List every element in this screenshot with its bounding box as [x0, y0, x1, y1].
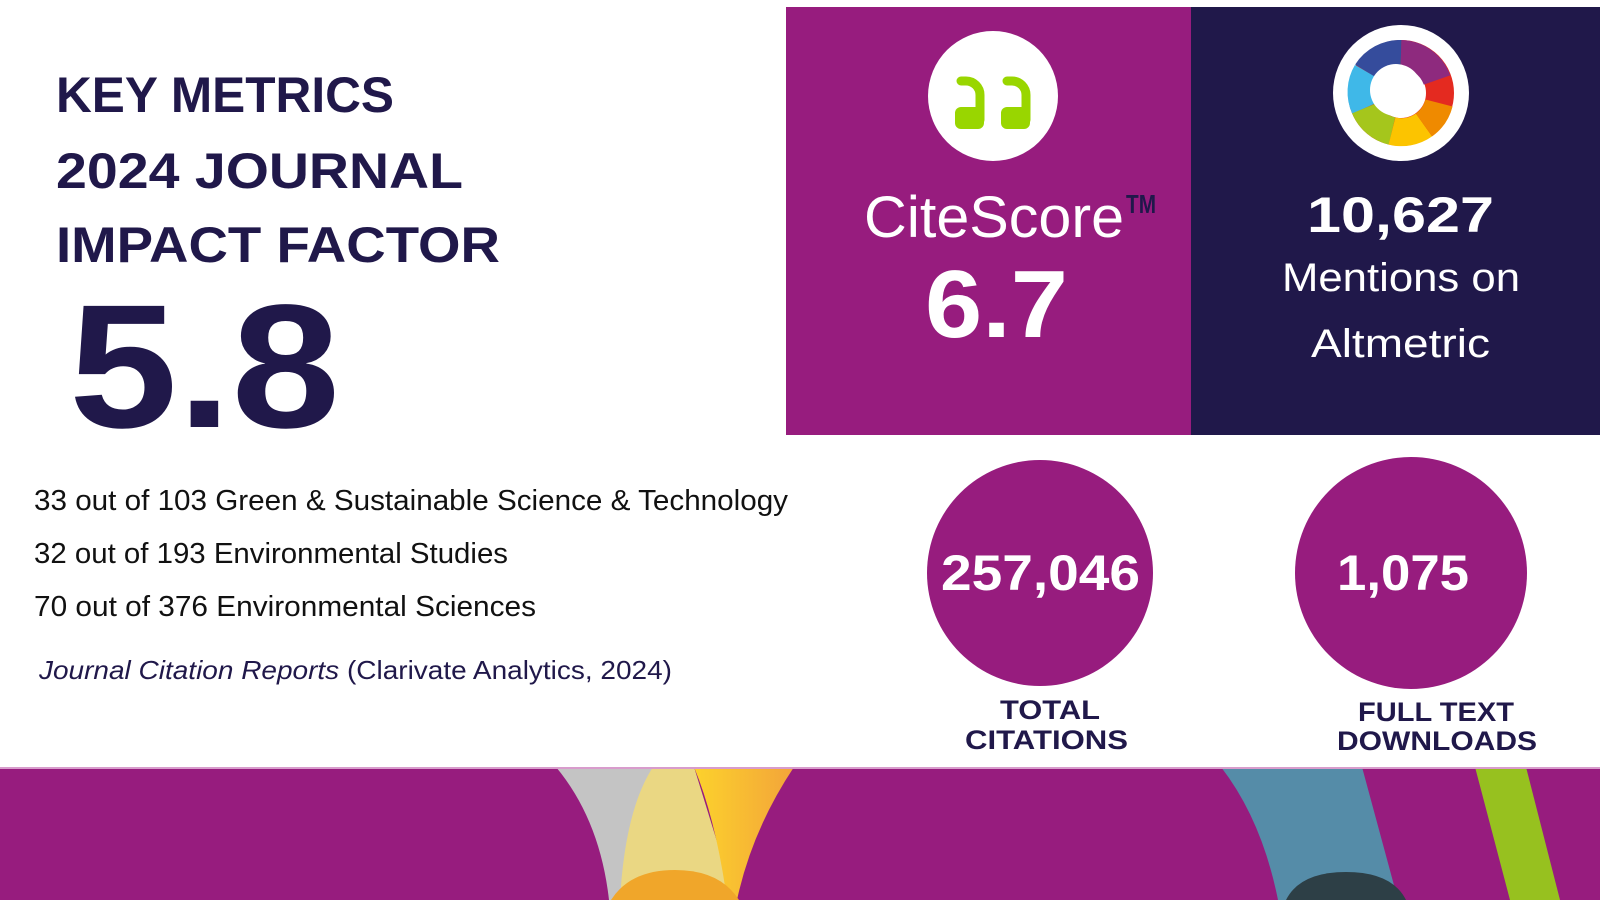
title block — [56, 67, 500, 465]
icon: quote marks — [928, 31, 1058, 161]
altmetric mentions count: 10,627 — [1307, 187, 1494, 243]
heading: key metrics: KEY METRICS — [56, 67, 394, 123]
metric: total citations: TOTAL — [1000, 695, 1100, 725]
rankings list — [34, 485, 789, 623]
source citation: Journal Citation Reports (Clarivate Analytics, 2024) — [38, 655, 672, 685]
panel: altmetric — [1191, 7, 1600, 435]
metric: full text downloads: 1,075 — [1337, 545, 1469, 601]
icon: altmetric donut — [1333, 25, 1469, 161]
heading: impact factor: IMPACT FACTOR — [56, 217, 500, 273]
ranking 3: 70 out of 376 Environmental Sciences — [34, 591, 536, 623]
decorative bottom band — [0, 767, 1600, 900]
ranking 2: 32 out of 193 Environmental Studies — [34, 538, 508, 570]
citescore value: 6.7 — [925, 251, 1068, 358]
panel: citescore — [786, 7, 1192, 435]
metric: total citations: 257,046 — [941, 545, 1140, 601]
metric: full text downloads — [1295, 457, 1537, 756]
metric: full text downloads: DOWNLOADS — [1337, 726, 1537, 756]
metric: total citations: CITATIONS — [965, 725, 1128, 755]
ranking 1: 33 out of 103 Green & Sustainable Science & Technology — [34, 485, 789, 517]
citescore label: CiteScore — [864, 185, 1124, 250]
impact factor value: 5.8 — [69, 269, 340, 465]
metric: total citations — [927, 460, 1153, 755]
mentions label: Mentions on — [1282, 256, 1520, 300]
metric: full text downloads: FULL TEXT — [1358, 697, 1515, 727]
altmetric label: Altmetric — [1311, 322, 1490, 366]
heading: 2024 journal: 2024 JOURNAL — [56, 143, 463, 199]
trademark: TM — [1126, 189, 1156, 219]
